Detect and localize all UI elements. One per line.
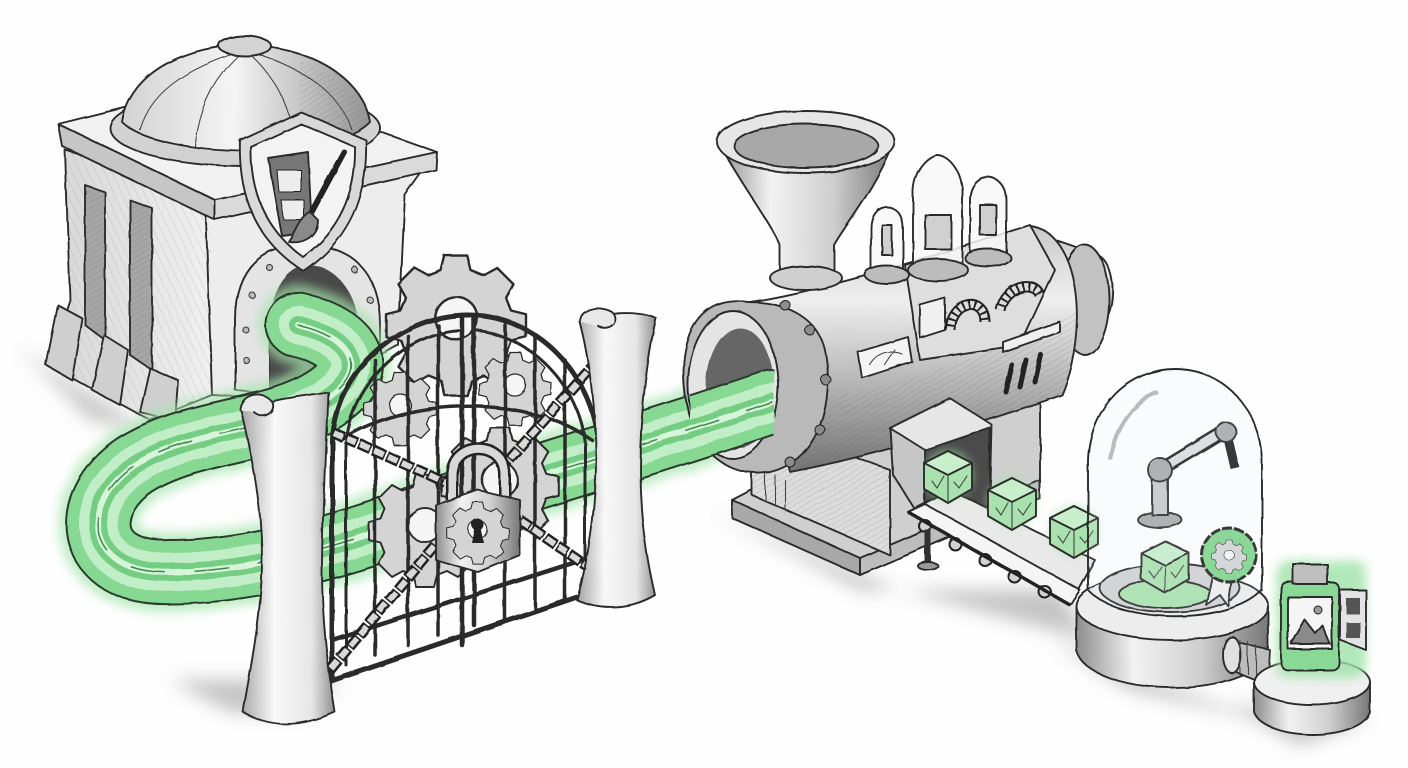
film canister [1276, 560, 1366, 678]
gears behind gate [364, 256, 559, 587]
machine pedestal [732, 400, 1040, 575]
green data stream [98, 325, 772, 572]
dome [110, 36, 380, 166]
pipe [1223, 637, 1270, 685]
padlock [436, 449, 520, 572]
vacuum tubes [865, 155, 1011, 284]
canister plinth [1254, 659, 1370, 734]
rear cap [1055, 240, 1113, 355]
film strip icon [268, 152, 312, 236]
cylinder shading [790, 310, 1078, 472]
left scroll pillar [240, 392, 335, 724]
shield emblem [240, 112, 366, 271]
wall hatching [48, 150, 212, 420]
gauge [858, 337, 912, 378]
stream glow [98, 325, 772, 572]
stream entering machine [690, 368, 774, 464]
glass dome with robot arm [1076, 369, 1268, 688]
wall recesses [85, 185, 152, 370]
robot arm [1138, 422, 1236, 528]
vent slots [1003, 322, 1060, 392]
roof slab [58, 80, 437, 200]
glass bell [1088, 369, 1262, 616]
product cubes on conveyor [924, 451, 1098, 558]
archway [235, 245, 380, 395]
main cylinder [750, 226, 1077, 472]
dome base [1076, 564, 1268, 688]
iron gate [332, 315, 598, 680]
checked cube [1119, 580, 1211, 608]
paintbrush icon [289, 152, 344, 242]
chains [330, 360, 600, 670]
control deck [905, 225, 1055, 360]
building front wall [205, 160, 430, 400]
processing machine [682, 110, 1114, 576]
ground shadows [18, 345, 1370, 745]
approval badge [1202, 528, 1256, 606]
dials and coils [920, 287, 1040, 338]
gate assembly [240, 256, 656, 724]
right scroll pillar [577, 308, 656, 607]
vault building [46, 36, 437, 422]
film canister station [1223, 560, 1370, 734]
front mouth [684, 300, 831, 473]
output hood [890, 398, 992, 525]
building left wall [48, 150, 212, 420]
stream body [98, 325, 772, 572]
conveyor belt [908, 490, 1095, 605]
funnel [717, 111, 895, 290]
plinths [46, 305, 178, 422]
